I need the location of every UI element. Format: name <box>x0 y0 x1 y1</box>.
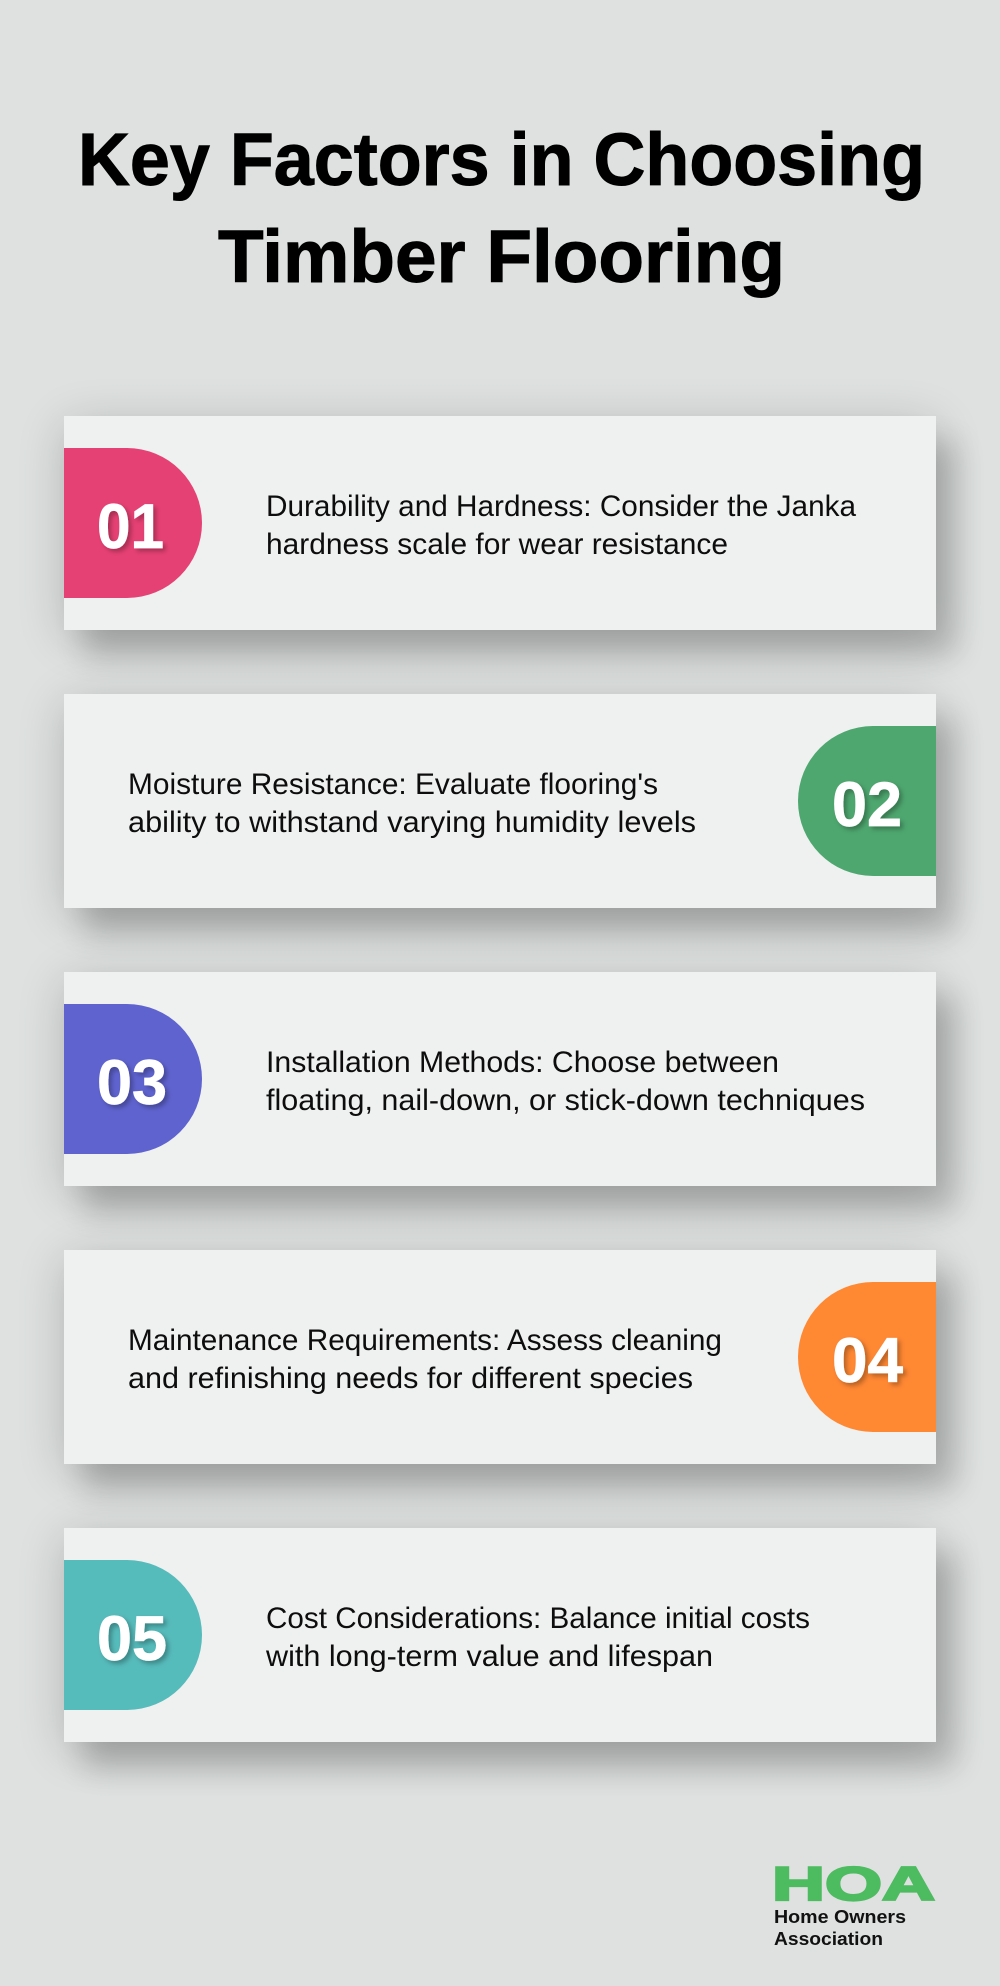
title <box>78 118 925 298</box>
text: moisture resistance <box>128 768 696 839</box>
text: cost considerations <box>265 1602 810 1673</box>
badge 03 <box>64 1004 202 1154</box>
title: Timber Flooring <box>218 215 785 298</box>
text: cost considerations: with long-term value and lifespan <box>265 1640 713 1673</box>
logo: HOA Home Owners Association: Association <box>774 1929 883 1949</box>
badge 05: 05 <box>97 1604 167 1674</box>
text: installation methods <box>266 1046 865 1117</box>
text: maintenance requirements: and refinishing needs for different species <box>128 1362 693 1395</box>
text: installation methods: Installation Methods: Choose between <box>266 1046 779 1079</box>
badge 04 <box>798 1282 936 1432</box>
logo: HOA Home Owners Association: HOA <box>772 1857 935 1910</box>
panel: maintenance requirements <box>64 1250 956 1490</box>
panel: durability and hardness <box>64 416 956 656</box>
panel: installation methods <box>64 972 956 1212</box>
text: moisture resistance: Moisture Resistance: Evaluate flooring's <box>128 768 658 801</box>
text: cost considerations: Cost Considerations: Balance initial costs <box>266 1602 810 1635</box>
badge 04: 04 <box>832 1326 903 1396</box>
badge 01: 01 <box>97 492 164 562</box>
logo: HOA Home Owners Association <box>772 1857 935 1949</box>
text: durability and hardness: Durability and Hardness: Consider the Janka <box>266 490 857 523</box>
text: installation methods: floating, nail-down, or stick-down techniques <box>266 1084 865 1117</box>
panel: moisture resistance <box>64 694 956 934</box>
badge 01 <box>64 448 202 598</box>
title: Key Factors in Choosing <box>78 118 925 201</box>
text: maintenance requirements: Maintenance Requirements: Assess cleaning <box>128 1324 722 1357</box>
logo: HOA Home Owners Association: Home Owners <box>774 1907 906 1927</box>
badge 02: 02 <box>832 770 902 840</box>
badge 05 <box>64 1560 202 1710</box>
badge 02 <box>798 726 936 876</box>
badge 03: 03 <box>97 1048 167 1118</box>
panel: cost considerations <box>64 1528 956 1768</box>
text: maintenance requirements <box>128 1324 722 1395</box>
text: durability and hardness <box>266 490 857 561</box>
text: moisture resistance: ability to withstand varying humidity levels <box>128 806 696 839</box>
text: durability and hardness: hardness scale for wear resistance <box>266 528 728 561</box>
